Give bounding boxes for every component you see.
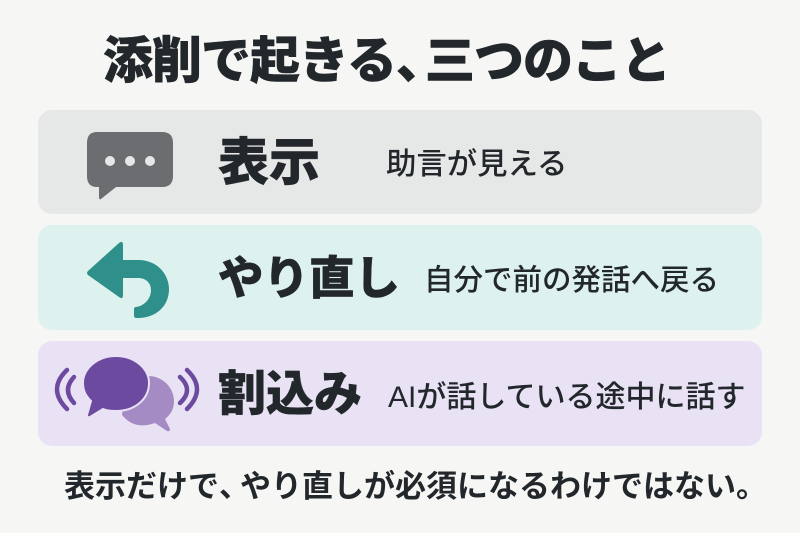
footer note: 表示だけで やり直しが必須になるわけではない。 [64,469,767,504]
panel: display [38,110,762,214]
text: display description: 助言が見える [386,147,567,181]
text: redo description: 自分で前の発話へ戻る [424,264,719,297]
heading: display: 表示 [218,134,320,191]
panel: redo [38,225,762,330]
footer note: 、 [219,469,250,504]
text: interrupt description: AIが話している途中に話す [388,381,745,414]
panel: interrupt [38,341,762,446]
title: 、 [396,33,445,89]
heading: interrupt: 割込み [218,368,362,421]
heading: redo: やり直し [218,253,400,304]
icon: speech bubble [87,132,173,200]
title: 添削で起きる 三つのこと [103,33,670,89]
icon: return arrow [87,242,169,318]
icon: overlapping speech bubbles [54,357,200,432]
